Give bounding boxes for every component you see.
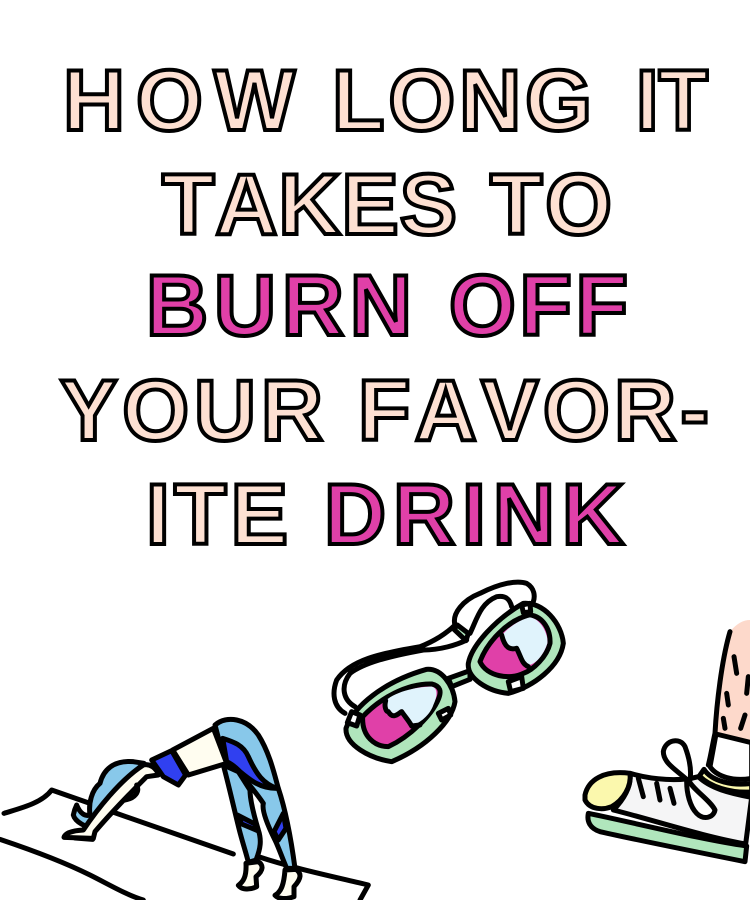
sole [588, 813, 747, 862]
title: BURN [146, 258, 412, 354]
sports top [152, 751, 186, 785]
title: LONG [332, 53, 592, 149]
front leg [215, 719, 295, 868]
feet [238, 862, 262, 889]
toe cap [585, 773, 630, 809]
left lens [363, 684, 440, 747]
left frame tabs [347, 708, 451, 726]
arm and hand [64, 765, 158, 838]
raised back leg [223, 765, 260, 862]
title: FAVOR- [358, 363, 709, 459]
leggings panels [223, 738, 277, 788]
midriff [173, 728, 227, 775]
sneaker collar [699, 769, 750, 792]
nose bridge [448, 671, 470, 687]
title: DRINK [324, 467, 624, 563]
title: TAKES [162, 157, 457, 253]
icon: swim goggles [334, 582, 563, 762]
title: OFF [449, 258, 628, 354]
title: TO [490, 157, 612, 253]
left frame [346, 669, 455, 762]
icon: yoga figure on mat [0, 719, 368, 900]
sock [710, 734, 750, 779]
title: ITE [146, 467, 288, 563]
title: HOW [63, 53, 296, 149]
leg hairs [723, 657, 748, 728]
title [60, 53, 709, 563]
goggle strap [334, 582, 534, 713]
title: IT [636, 53, 708, 149]
right frame tabs [508, 603, 531, 692]
icon: leg and sneaker [585, 620, 750, 862]
yoga mat [0, 790, 368, 900]
strap clip [454, 625, 468, 641]
shoelace bow [663, 741, 691, 780]
eyelet laces [638, 778, 674, 803]
sneaker body [613, 773, 750, 844]
title: YOUR [60, 363, 323, 459]
right frame [468, 603, 563, 693]
right lens [480, 615, 550, 677]
hair [73, 761, 144, 828]
leg [713, 620, 750, 743]
